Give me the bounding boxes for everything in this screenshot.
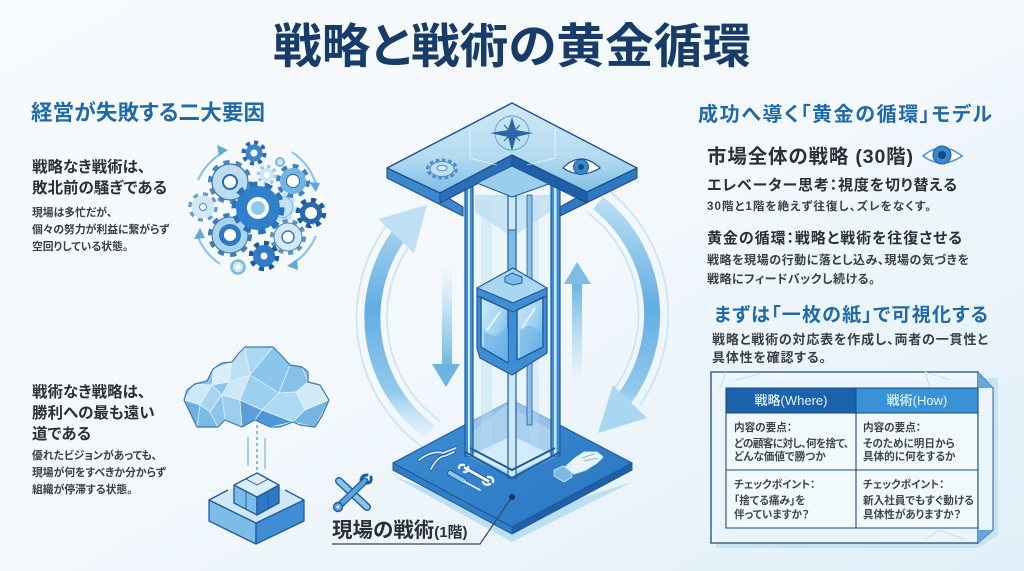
table cells: 「捨てる痛み」を <box>734 494 805 507</box>
table: strategy and tactics sheet <box>711 372 998 548</box>
arrow: right circulating arc <box>588 184 668 433</box>
elevator car <box>477 230 547 375</box>
gear <box>232 260 244 274</box>
icon: compass <box>490 116 533 151</box>
text block: strategy without tactics: 優れたビジョンがあっても、 <box>32 448 157 462</box>
text block: tactics without strategy <box>32 157 170 253</box>
panel: right golden cycle model <box>698 102 998 548</box>
gear <box>234 184 282 232</box>
icon: crossed tools <box>334 475 371 512</box>
title: 戦略と戦術の黄金循環 <box>273 21 751 74</box>
shaft: back glass panels <box>468 185 555 478</box>
text block: strategy without tactics <box>32 382 167 496</box>
heading: golden cycle model: 成功へ導く「黄金の循環」モデル <box>698 102 992 126</box>
text block: tactics without strategy: 敗北前の騒ぎである <box>32 178 167 197</box>
icon: small cube on base <box>209 473 304 544</box>
gear <box>244 142 264 164</box>
table cells: 新入社員でもすぐ動ける <box>863 494 974 507</box>
arrow: left circulating arc <box>357 205 440 458</box>
text block: strategy without tactics: 戦術なき戦略は、 <box>32 382 146 401</box>
icon: glove on base <box>554 452 603 482</box>
gear <box>210 162 250 202</box>
gear <box>276 158 284 166</box>
table cells: そのために明日から <box>863 438 955 450</box>
chart: elevator cycle diagram <box>332 103 668 544</box>
text block: strategy without tactics: 道である <box>32 425 91 443</box>
table cells: 具体的に何をするか <box>863 450 956 463</box>
gear <box>272 221 304 253</box>
gear <box>251 243 277 269</box>
icon: screwdriver on base <box>450 473 480 490</box>
text block: tactics without strategy: 空回りしている状態。 <box>32 239 128 253</box>
text block: visualise on one sheet: まずは「一枚の紙」で可視化する <box>714 304 988 326</box>
icon: pliers on base <box>419 448 456 469</box>
gear <box>278 166 308 196</box>
table cells: 内容の要点： <box>863 421 921 434</box>
table header: 戦術(How) <box>887 393 947 408</box>
plate: top floor with icons <box>387 103 637 216</box>
table cells: チェックポイント： <box>734 479 815 491</box>
text block: visualise on one sheet: 戦略と戦術の対応表を作成し、両者の一貫性と <box>712 332 988 347</box>
icon: spinning gears <box>190 142 324 274</box>
label: field tactics first floor <box>332 494 515 544</box>
text block: strategy without tactics: 勝利への最も遠い <box>32 404 155 422</box>
icon: eye <box>923 146 962 164</box>
text block: whole market strategy: 戦略にフィードバックし続ける。 <box>707 271 875 286</box>
table cells: 具体性がありますか？ <box>863 508 961 521</box>
icon: wrench on base <box>459 465 493 485</box>
text block: strategy without tactics: 現場が何をすべきか分からず <box>32 465 167 479</box>
text block: whole market strategy: エレベーター思考：視度を切り替える <box>707 176 957 194</box>
text block: tactics without strategy: 戦略なき戦術は、 <box>32 157 146 176</box>
arrow: up <box>564 262 591 385</box>
text block: visualise on one sheet: 具体性を確認する。 <box>712 350 826 365</box>
icon: faceted cloud <box>184 347 329 427</box>
table header <box>755 393 947 408</box>
table cells: どの顧客に対し、何を捨て、 <box>734 437 849 450</box>
table cells: どんな価値で勝つか <box>734 450 826 463</box>
table cells: 内容の要点： <box>734 421 792 434</box>
table cells: 伴っていますか？ <box>734 508 809 521</box>
arrow: down <box>432 265 460 387</box>
label: field tactics first floor: 現場の戦術(1階) <box>332 518 468 542</box>
icon: gear on plate <box>428 160 456 178</box>
heading: two failure causes: 経営が失敗する二大要因 <box>31 100 265 125</box>
text block: tactics without strategy: 個々の努力が利益に繋がらず <box>32 222 170 236</box>
icon: eye on plate <box>563 159 600 174</box>
gear <box>258 166 276 184</box>
table cells <box>734 421 974 521</box>
text block: strategy without tactics: 組織が停滞する状態。 <box>32 482 133 496</box>
gear <box>298 200 324 226</box>
text block: tactics without strategy: 現場は多忙だが、 <box>32 205 112 219</box>
table cells: チェックポイント： <box>863 479 944 491</box>
text block: whole market strategy: 戦略を現場の行動に落とし込み、現場の気づきを <box>707 252 969 267</box>
text block: visualise on one sheet <box>712 304 988 365</box>
text block: whole market strategy: 30階と1階を絶えず往復し、ズレをなくす。 <box>707 199 931 213</box>
gear <box>210 215 250 255</box>
connector: dashed lines from cloud <box>248 425 265 470</box>
table header: 戦略(Where) <box>755 393 827 408</box>
shaft: columns <box>465 186 560 478</box>
text block: whole market strategy: 市場全体の戦略 (30階) <box>707 145 913 168</box>
text block: whole market strategy: 黄金の循環：戦略と戦術を往復させる <box>707 229 962 247</box>
gear <box>269 194 295 220</box>
text block: whole market strategy <box>707 145 969 286</box>
gear <box>190 194 216 220</box>
floor: base plate <box>393 400 632 542</box>
panel: left causes <box>31 100 329 544</box>
